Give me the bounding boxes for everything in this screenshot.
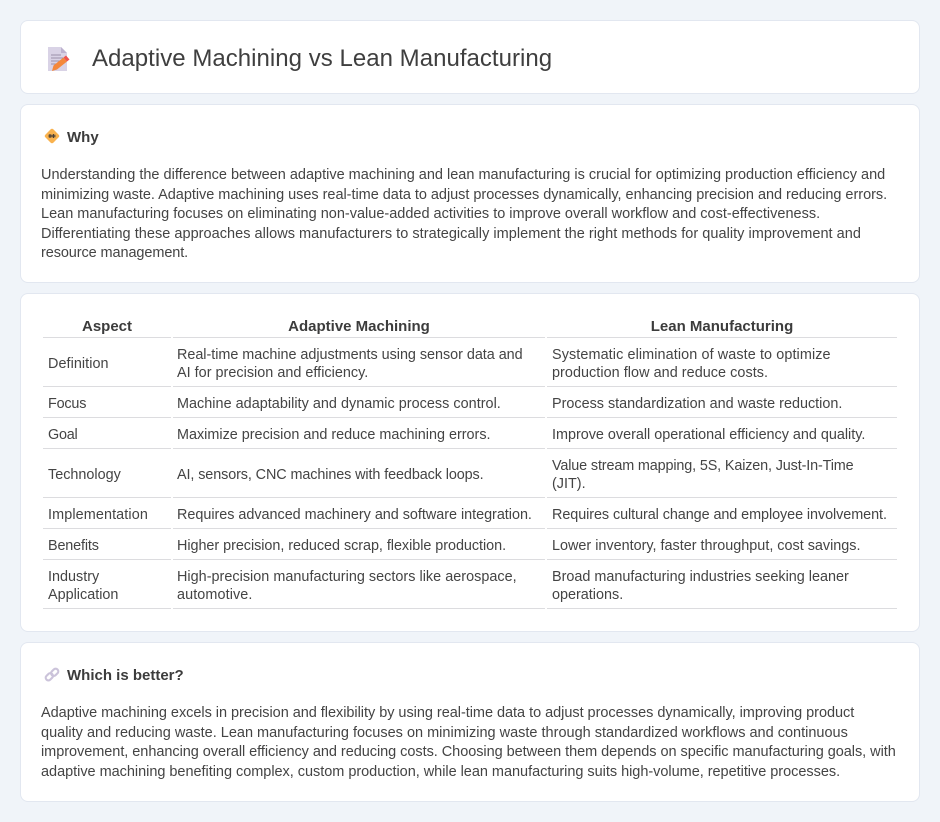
- why body text: [41, 167, 887, 261]
- which is better body text: Adaptive machining excels in precision and flexibility by using real-time data to adjust processes dynamically, improving product: [41, 705, 854, 721]
- icon: link: [44, 668, 60, 682]
- row: definition: production flow and reduce costs.: [552, 365, 768, 381]
- panel: why: [20, 104, 920, 283]
- row: goal: Improve overall operational efficiency and quality.: [552, 427, 865, 443]
- icon: document with pencil: [48, 47, 70, 71]
- icon: warning diamond: [44, 128, 60, 144]
- row: industry application: automotive.: [177, 587, 252, 603]
- table header row: [43, 318, 897, 338]
- why body text: Differentiating these approaches allows manufacturers to strategically implement the right methods for quality improvement and: [41, 226, 861, 242]
- row: industry application: Industry: [48, 569, 99, 585]
- row: technology: Technology: [48, 467, 121, 483]
- panel: which is better: [20, 642, 920, 802]
- row: goal: Goal: [48, 427, 77, 443]
- panel: title header: [20, 20, 920, 94]
- heading: why: Why: [67, 129, 99, 146]
- row: goal: Maximize precision and reduce machining errors.: [177, 427, 491, 443]
- heading: which is better: Which is better?: [67, 667, 184, 684]
- title: Adaptive Machining vs Lean Manufacturing: [92, 45, 552, 72]
- why body text: Understanding the difference between adaptive machining and lean manufacturing is crucial for optimizing production efficiency and: [41, 167, 885, 183]
- row: definition: Systematic elimination of waste to optimize: [552, 347, 831, 363]
- row: industry application: Application: [48, 587, 118, 603]
- row: definition: [43, 347, 897, 387]
- row: technology: [43, 458, 897, 498]
- row: implementation: Requires cultural change and employee involvement.: [552, 507, 887, 523]
- row: technology: Value stream mapping, 5S, Kaizen, Just-In-Time: [552, 458, 854, 474]
- row: implementation: Requires advanced machinery and software integration.: [177, 507, 532, 523]
- row: implementation: [43, 507, 897, 529]
- row: benefits: Benefits: [48, 538, 99, 554]
- row: benefits: Higher precision, reduced scrap, flexible production.: [177, 538, 506, 554]
- row: benefits: Lower inventory, faster throughput, cost savings.: [552, 538, 860, 554]
- row: industry application: Broad manufacturing industries seeking leaner: [552, 569, 849, 585]
- which is better body text: improvement, enhancing overall efficiency and reducing costs. Choosing between them depends on specific manufacturing goals, with: [41, 744, 896, 760]
- which is better body text: [41, 705, 896, 780]
- which is better body text: adaptive machining benefiting complex, custom production, while lean manufacturing suits high-volume, repetitive processes.: [41, 764, 840, 780]
- why body text: minimizing waste. Adaptive machining uses real-time data to adjust processes dynamically, enhancing precision and reducing errors.: [41, 186, 887, 202]
- panel: comparison table: [20, 293, 920, 632]
- table header row: Lean Manufacturing: [651, 318, 793, 335]
- row: focus: Machine adaptability and dynamic process control.: [177, 396, 501, 412]
- row: focus: Process standardization and waste reduction.: [552, 396, 842, 412]
- row: benefits: [43, 538, 897, 560]
- why body text: Lean manufacturing focuses on eliminating non-value-added activities to improve overall workflow and cost-effectiveness.: [41, 206, 820, 222]
- row: technology: (JIT).: [552, 476, 586, 492]
- row: industry application: operations.: [552, 587, 623, 603]
- row: definition: Definition: [48, 356, 109, 372]
- row: industry application: High-precision manufacturing sectors like aerospace,: [177, 569, 517, 585]
- row: industry application: [43, 569, 897, 609]
- row: focus: Focus: [48, 396, 86, 412]
- row: goal: [43, 427, 897, 449]
- table header row: Aspect: [82, 318, 132, 335]
- row: implementation: Implementation: [48, 507, 148, 523]
- why body text: resource management.: [41, 245, 188, 261]
- row: focus: [43, 396, 897, 418]
- row: definition: Real-time machine adjustments using sensor data and: [177, 347, 523, 363]
- which is better body text: quality and reducing waste. Lean manufacturing focuses on minimizing waste through standardized workflows and continuous: [41, 724, 848, 740]
- row: definition: AI for precision and efficiency.: [177, 365, 368, 381]
- row: technology: AI, sensors, CNC machines with feedback loops.: [177, 467, 484, 483]
- table header row: Adaptive Machining: [288, 318, 430, 335]
